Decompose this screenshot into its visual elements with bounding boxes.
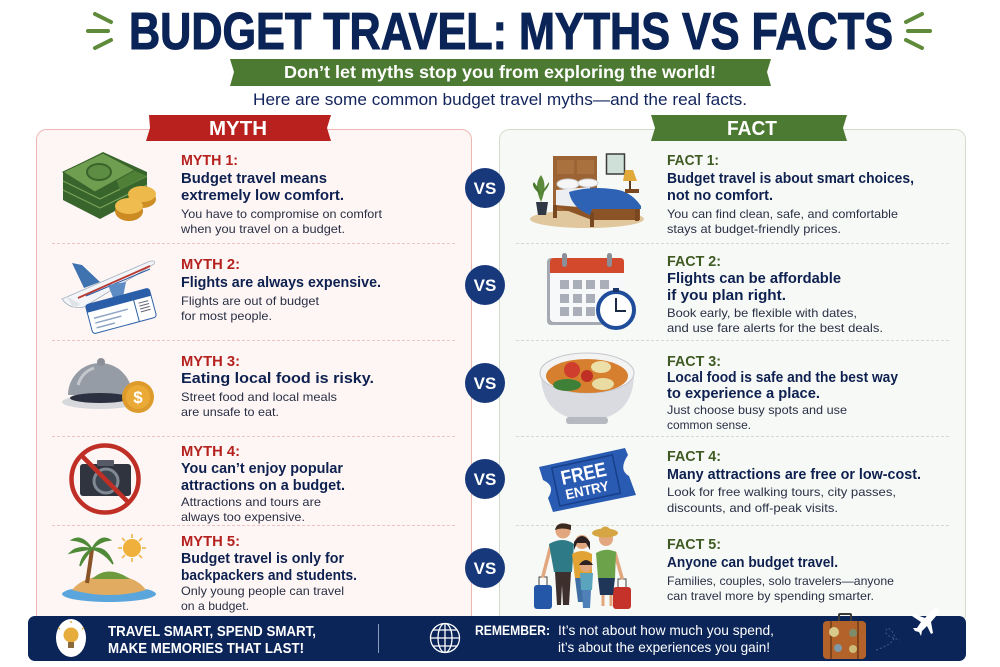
footer band — [28, 608, 966, 661]
myth 2 text: MYTH 2: — [181, 257, 240, 273]
fact 3 text: to experience a place. — [667, 386, 820, 402]
icon: free entry ticket: FREE — [559, 459, 609, 490]
myth 3 text — [181, 354, 374, 419]
myth 1 text: extremely low comfort. — [181, 188, 344, 204]
myth 4 text: You can’t enjoy popular — [181, 461, 343, 477]
myth 4 text: attractions on a budget. — [181, 478, 345, 494]
fact 2 text: and use fare alerts for the best deals. — [667, 321, 883, 335]
fact 5 text — [667, 537, 894, 603]
intro text: Here are some common budget travel myths—and the real facts. — [253, 91, 747, 109]
fact 2 text: FACT 2: — [667, 254, 721, 270]
fact 2 text: Book early, be flexible with dates, — [667, 306, 857, 320]
vs badge 5 — [465, 548, 505, 588]
icon: money stack and coins — [63, 152, 156, 221]
fact banner: FACT — [727, 118, 777, 140]
fact 3 text: Local food is safe and the best way — [667, 370, 898, 386]
myth banner — [146, 115, 331, 141]
myth banner: MYTH — [209, 118, 267, 140]
footer slogan: MAKE MEMORIES THAT LAST! — [108, 641, 304, 657]
footer message: REMEMBER: — [475, 623, 550, 638]
icon: family with luggage — [534, 523, 631, 609]
icon: free entry ticket: ENTRY — [564, 477, 611, 502]
fact 1 text: Budget travel is about smart choices, — [667, 171, 914, 187]
icon: calendar and clock — [547, 253, 634, 328]
footer slogan — [108, 624, 316, 657]
myth 3 text: Street food and local meals — [181, 390, 337, 404]
fact 2 text — [667, 254, 883, 335]
myth 4 text: MYTH 4: — [181, 444, 240, 460]
fact 5 text: can travel more by spending smarter. — [667, 589, 874, 603]
icon: light bulb — [56, 619, 86, 657]
footer message — [475, 622, 774, 655]
icon: left sparks — [88, 14, 111, 48]
myth 2 text — [181, 257, 381, 323]
myth 3 text: Eating local food is risky. — [181, 371, 374, 387]
icon: palm island and sun — [62, 534, 156, 602]
myth 1 text: You have to compromise on comfort — [181, 207, 383, 221]
myth 4 text: always too expensive. — [181, 510, 305, 524]
myth 2 text: for most people. — [181, 309, 272, 323]
myth 5 text: MYTH 5: — [181, 534, 240, 550]
fact 1 text — [667, 153, 914, 236]
icon: plane and boarding pass — [62, 261, 157, 334]
myth 2 text: Flights are always expensive. — [181, 275, 381, 291]
myth 5 text: on a budget. — [181, 599, 249, 613]
fact 1 text: FACT 1: — [667, 153, 719, 169]
fact 1 text: You can find clean, safe, and comfortable — [667, 207, 898, 221]
myth 3 text: are unsafe to eat. — [181, 405, 279, 419]
footer message: it’s about the experiences you gain! — [558, 639, 770, 655]
vs badge 3 — [465, 363, 505, 403]
icon: free entry ticket — [539, 448, 636, 512]
fact 3 text: common sense. — [667, 418, 751, 432]
myth 5 text: backpackers and students. — [181, 568, 357, 584]
fact 4 text — [667, 449, 921, 515]
vs badge 1 — [465, 168, 505, 208]
panel: fact — [500, 130, 966, 624]
vs badge 5: VS — [474, 559, 496, 578]
vs badge 4 — [465, 459, 505, 499]
icon: right sparks — [906, 14, 930, 48]
myth 2 text: Flights are out of budget — [181, 294, 320, 308]
panel: myth — [36, 130, 472, 624]
vs badge 1: VS — [474, 179, 496, 198]
icon: globe — [430, 624, 460, 652]
myth 5 text: Budget travel is only for — [181, 551, 344, 567]
icon: serving cloche with coin — [62, 358, 154, 413]
fact 5 text: FACT 5: — [667, 537, 721, 553]
myth 1 text: when you travel on a budget. — [180, 222, 345, 236]
myth 1 text: Budget travel means — [181, 171, 327, 187]
fact 4 text: FACT 4: — [667, 449, 721, 465]
fact 5 text: Anyone can budget travel. — [667, 555, 838, 571]
footer divider — [378, 624, 380, 653]
myth 4 text: Attractions and tours are — [181, 495, 321, 509]
subtitle ribbon: Don’t let myths stop you from exploring the world! — [284, 62, 716, 82]
fact 4 text: Many attractions are free or low-cost. — [667, 467, 921, 483]
footer slogan: TRAVEL SMART, SPEND SMART, — [108, 624, 316, 640]
vs badge 4: VS — [474, 470, 496, 489]
vs badge 3: VS — [474, 374, 496, 393]
fact 1 text: not no comfort. — [667, 188, 773, 204]
subtitle ribbon — [230, 59, 771, 86]
myth 5 text — [181, 534, 357, 613]
fact banner — [651, 115, 847, 141]
fact 1 text: stays at budget-friendly prices. — [667, 222, 841, 236]
myth 1 text: MYTH 1: — [181, 153, 238, 169]
myth 1 text — [180, 153, 383, 236]
icon: no camera — [72, 446, 138, 512]
icon: bed — [530, 154, 644, 228]
vs badge 2: VS — [474, 276, 496, 295]
icon: serving cloche with coin: $ — [133, 388, 143, 407]
myth 3 text: MYTH 3: — [181, 354, 240, 370]
fact 2 text: Flights can be affordable — [667, 271, 841, 287]
footer message: It’s not about how much you spend, — [558, 622, 774, 638]
fact 3 text: FACT 3: — [667, 354, 721, 370]
icon: plane and dotted trail — [876, 608, 939, 650]
fact 3 text: Just choose busy spots and use — [667, 403, 847, 417]
fact 4 text: Look for free walking tours, city passes, — [667, 485, 896, 499]
fact 3 text — [667, 354, 898, 432]
myth 5 text: Only young people can travel — [181, 584, 344, 598]
fact 5 text: Families, couples, solo travelers—anyone — [667, 574, 894, 588]
fact 4 text: discounts, and off-peak visits. — [667, 501, 838, 515]
icon: suitcase — [823, 614, 866, 659]
fact 2 text: if you plan right. — [667, 288, 786, 304]
myth 4 text — [181, 444, 345, 524]
vs badge 2 — [465, 265, 505, 305]
icon: soup bowl — [540, 353, 634, 424]
